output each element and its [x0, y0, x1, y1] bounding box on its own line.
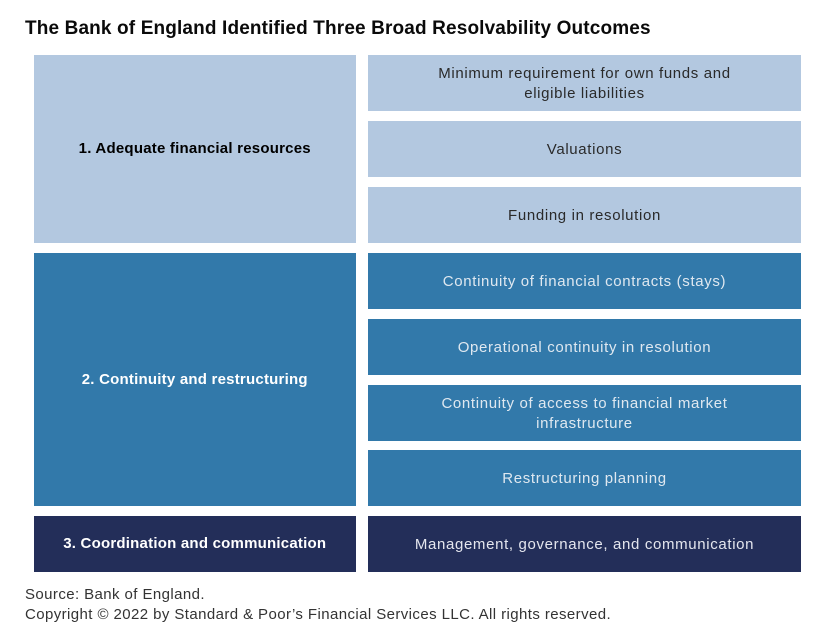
panel: continuity of financial contracts: [368, 253, 801, 309]
panel: funding in resolution: Funding in resolution: [508, 207, 661, 224]
source note: [25, 586, 611, 623]
panel: outcome 1 heading: 1. Adequate financial resources: [79, 140, 311, 157]
source note: Copyright © 2022 by Standard & Poor’s Financial Services LLC. All rights reserved.: [25, 606, 611, 623]
panel: outcome 3 heading: [34, 516, 356, 572]
panel: continuity of access to infrastructure: infrastructure: [536, 415, 633, 432]
panel: management and governance: Management, governance, and communication: [415, 536, 754, 553]
panel: management and governance: [368, 516, 801, 572]
panel: valuations: [368, 121, 801, 177]
panel: minimum requirement: Minimum requirement for own funds and: [438, 65, 731, 82]
panel: minimum requirement: [368, 55, 801, 111]
panel: restructuring planning: Restructuring planning: [502, 470, 667, 487]
panel: minimum requirement: eligible liabilities: [524, 85, 645, 102]
panel: outcome 2 heading: [34, 253, 356, 506]
panel: restructuring planning: [368, 450, 801, 506]
panel: valuations: Valuations: [547, 141, 622, 158]
panel: continuity of financial contracts: Continuity of financial contracts (stays): [443, 273, 726, 290]
panel: operational continuity: [368, 319, 801, 375]
panel: outcome 1 heading: [34, 55, 356, 243]
source note: Source: Bank of England.: [25, 586, 205, 603]
panel: continuity of access to infrastructure: Continuity of access to financial market: [441, 395, 728, 412]
title: The Bank of England Identified Three Broad Resolvability Outcomes: [25, 18, 651, 39]
panel: operational continuity: Operational continuity in resolution: [458, 339, 711, 356]
panel: continuity of access to infrastructure: [368, 385, 801, 441]
panel: funding in resolution: [368, 187, 801, 243]
panel: outcome 2 heading: 2. Continuity and restructuring: [82, 370, 308, 388]
panel: outcome 3 heading: 3. Coordination and communication: [63, 535, 326, 552]
